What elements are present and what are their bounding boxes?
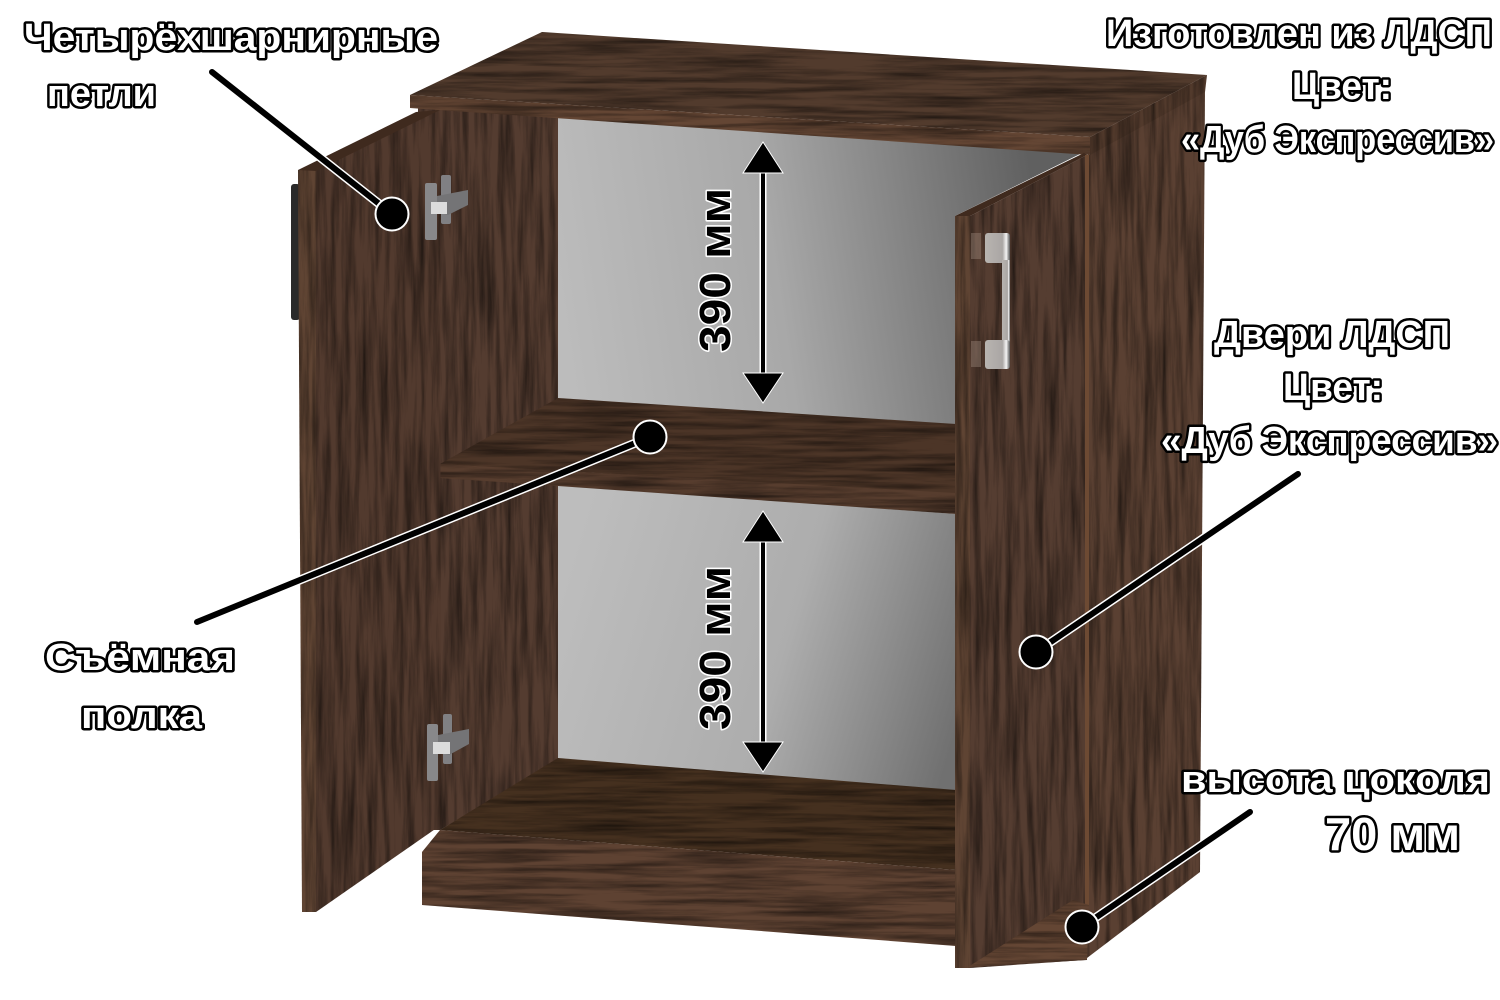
label: doors: «Дуб Экспрессив» (1161, 420, 1498, 462)
label: material (1106, 13, 1494, 161)
right door top edge (955, 153, 1087, 216)
label: shelf: Съёмная (45, 637, 235, 679)
dimension label: lower: 390 мм (691, 566, 740, 730)
top board front edge (410, 95, 1090, 155)
dimension arrow: upper compartment (743, 142, 783, 403)
label: doors (1161, 314, 1498, 462)
bottom floor board (440, 758, 956, 870)
label: hinges (24, 17, 438, 115)
plinth (422, 830, 956, 946)
door handle (971, 233, 1010, 369)
label: doors: Цвет: (1283, 367, 1383, 409)
label: material: Изготовлен из ЛДСП (1106, 13, 1492, 55)
dimension arrow: lower compartment (743, 511, 783, 772)
back panel, lower compartment (556, 484, 956, 792)
top board right edge (1090, 75, 1207, 155)
left door handle back (291, 184, 300, 320)
cabinet illustration (291, 32, 1207, 968)
label: hinges: петли (47, 73, 156, 115)
removable shelf top (440, 398, 956, 494)
label: plinth height (1181, 759, 1490, 860)
upper hinge (425, 175, 468, 240)
right door edge (955, 216, 970, 968)
left door edge (298, 170, 316, 912)
left door inside face (316, 110, 441, 912)
label: shelf (45, 637, 235, 737)
lower hinge (427, 714, 469, 781)
back panel, upper compartment (556, 112, 1088, 426)
label: plinth height: высота цоколя (1181, 759, 1490, 801)
dimension label: upper: 390 мм (691, 188, 740, 352)
right corner edge strip (1085, 155, 1089, 905)
label: material: Цвет: (1292, 66, 1392, 108)
label: hinges: Четырёхшарнирные (24, 17, 438, 59)
removable shelf front edge (440, 464, 956, 514)
left door top edge (298, 110, 440, 171)
right side panel (1087, 90, 1205, 958)
label: shelf: полка (81, 695, 203, 737)
plinth corner below door (968, 900, 1089, 967)
left inner side wall (418, 104, 558, 830)
callout: shelf (197, 420, 666, 622)
label: plinth height: 70 мм (1325, 808, 1460, 860)
label: doors: Двери ЛДСП (1214, 314, 1450, 356)
callout: plinth (1066, 812, 1250, 944)
callout: doors (1020, 474, 1298, 668)
callout: hinges (212, 72, 408, 230)
right door face (970, 156, 1085, 968)
top board surface (410, 32, 1207, 137)
